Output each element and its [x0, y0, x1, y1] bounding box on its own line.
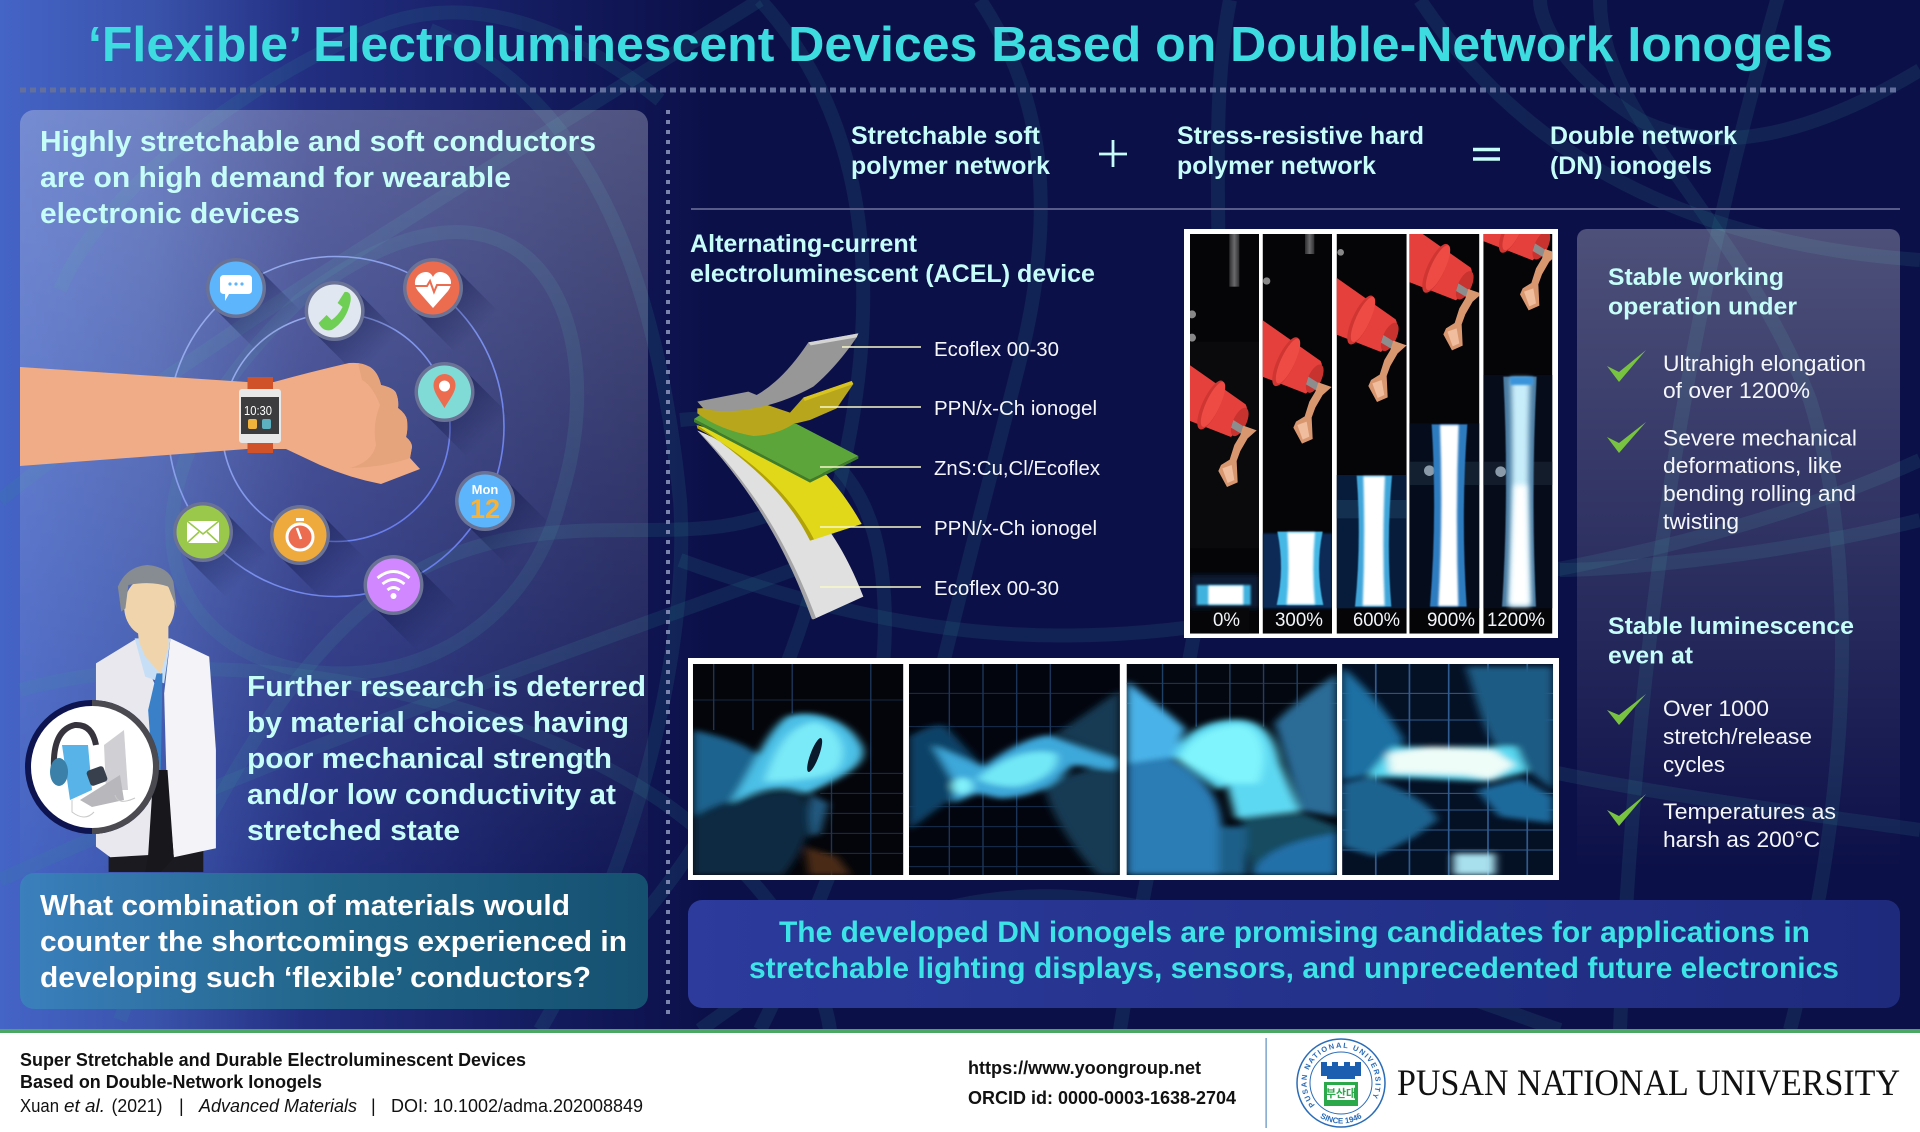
icon: wifi — [364, 555, 464, 655]
heading: stable working operation: operation under — [1608, 294, 1797, 320]
text: research deterred: by material choices having — [247, 707, 629, 739]
heading: stable luminescence: even at — [1608, 642, 1693, 670]
photo strip: deformations — [688, 658, 1559, 880]
layer labels: Ecoflex 00-30 — [934, 339, 1059, 361]
conclusion banner — [688, 900, 1900, 1008]
photo: 0% — [1190, 234, 1259, 634]
gadgets: headphones, phone, power bank, watch — [50, 725, 135, 817]
citation: | — [179, 1096, 184, 1116]
text: research deterred: and/or low conductivity at — [247, 779, 616, 811]
text: research deterred: Further research is deterred — [247, 671, 646, 703]
check item: deformations: twisting — [1663, 509, 1739, 534]
layer labels: PPN/x-Ch ionogel — [934, 518, 1097, 540]
ACEL device heading: Alternating-current — [690, 230, 918, 258]
layer labels: PPN/x-Ch ionogel — [934, 398, 1097, 420]
citation: Xuan — [20, 1096, 59, 1116]
layer: emissive ZnS — [694, 415, 858, 483]
arm with smartwatch — [20, 363, 420, 484]
term: soft network: Stretchable soft — [851, 122, 1041, 150]
layer labels: ZnS:Cu,Cl/Ecoflex — [934, 458, 1100, 480]
citation: Advanced Materials — [198, 1096, 357, 1116]
strain labels: 1200% — [1487, 610, 1545, 631]
term: soft network — [851, 122, 1050, 180]
term: hard network — [1177, 122, 1424, 180]
layer labels — [934, 339, 1100, 600]
university seal: 부산대 — [1326, 1086, 1356, 1100]
photo strip: stretching 0 to 1200% — [1184, 229, 1558, 638]
icon: mail — [173, 502, 273, 602]
panel background — [20, 110, 648, 910]
callout: question: What combination of materials would — [40, 890, 570, 922]
citation: et al. — [64, 1096, 105, 1116]
icon: calendar — [455, 471, 555, 571]
icon: calendar: 12 — [470, 494, 500, 524]
photo: stretched band — [1342, 664, 1553, 875]
heading: stretchable conductors: are on high demand for wearable — [40, 162, 511, 194]
check item: elongation — [1607, 350, 1866, 403]
layer: top Ecoflex — [697, 333, 858, 411]
heading: stable working operation: Stable working — [1608, 264, 1784, 291]
check item: temperature — [1607, 794, 1836, 852]
footer — [0, 1029, 1920, 1132]
callout: question — [20, 873, 648, 1009]
panel: wearable electronics problem — [20, 110, 648, 1009]
conclusion banner: stretchable lighting displays, sensors, and unprecedented future electronics — [749, 952, 1839, 985]
term: DN ionogels: Double network — [1550, 122, 1737, 150]
icon: location pin — [414, 362, 514, 462]
equation header — [851, 122, 1737, 180]
citation: DOI: 10.1002/adma.202008849 — [391, 1096, 643, 1116]
doctor figure — [96, 565, 216, 872]
callout: question: developing such ‘flexible’ conductors? — [40, 962, 591, 994]
citation: Super Stretchable and Durable Electroluminescent Devices — [20, 1050, 526, 1070]
citation — [20, 1050, 643, 1116]
layered device diagram — [694, 333, 863, 619]
term: hard network: Stress-resistive hard — [1177, 122, 1424, 150]
citation: | — [371, 1096, 376, 1116]
citation: Based on Double-Network Ionogels — [20, 1072, 322, 1092]
icon: chat — [206, 258, 306, 358]
text: research deterred — [247, 671, 646, 847]
check item: deformations: bending rolling and — [1663, 481, 1856, 506]
photo: 900% — [1409, 234, 1480, 634]
heading: stable luminescence — [1608, 613, 1854, 670]
check item: deformations — [1607, 422, 1857, 534]
ACEL device heading — [690, 230, 1095, 288]
heading: stretchable conductors: Highly stretchable and soft conductors — [40, 126, 596, 158]
smartwatch: 10:30 — [244, 403, 272, 418]
icon: calendar: Mon — [472, 482, 498, 497]
strain labels: 600% — [1353, 610, 1400, 631]
gadget circle — [25, 700, 159, 834]
check item: cycles: cycles — [1663, 752, 1725, 777]
strain labels: 900% — [1427, 610, 1475, 631]
photo: 1200% — [1483, 234, 1552, 634]
plus sign — [1099, 140, 1127, 167]
contact links — [968, 1058, 1236, 1108]
callout: question: counter the shortcomings experienced in — [40, 926, 627, 958]
heading: stable luminescence: Stable luminescence — [1608, 613, 1854, 640]
photo: 300% — [1262, 234, 1332, 634]
check item: elongation: of over 1200% — [1663, 378, 1810, 403]
text: research deterred: poor mechanical strength — [247, 743, 612, 775]
panel: stable operation — [1577, 229, 1900, 870]
conclusion banner: The developed DN ionogels are promising candidates for applications in — [779, 916, 1810, 949]
check item: deformations: deformations, like — [1663, 453, 1842, 478]
term: DN ionogels — [1550, 122, 1737, 180]
icon: stopwatch — [270, 505, 370, 605]
check item: elongation: Ultrahigh elongation — [1663, 351, 1866, 376]
strain labels: 0% — [1213, 610, 1240, 631]
panel background — [1577, 229, 1900, 870]
photo: rolled device — [693, 664, 903, 875]
smartwatch — [239, 377, 281, 453]
citation: (2021) — [112, 1096, 162, 1116]
text: research deterred: stretched state — [247, 815, 460, 847]
check item: cycles: stretch/release — [1663, 724, 1812, 749]
leader lines — [820, 347, 921, 587]
layer: top ionogel — [697, 381, 853, 436]
term: hard network: polymer network — [1177, 152, 1376, 180]
ACEL device heading: electroluminescent (ACEL) device — [690, 260, 1095, 288]
contact links: https://www.yoongroup.net — [968, 1058, 1201, 1078]
check item: temperature: Temperatures as — [1663, 799, 1836, 824]
layer: bottom ionogel — [697, 425, 862, 541]
term: soft network: polymer network — [851, 152, 1050, 180]
university seal: SINCE 1946 — [1320, 1113, 1362, 1124]
heading: stretchable conductors — [40, 126, 596, 230]
orbit rings — [168, 256, 504, 596]
icon: phone — [305, 281, 405, 381]
check item: temperature: harsh as 200°C — [1663, 827, 1820, 852]
photo: folded device — [1127, 664, 1337, 875]
strain labels: 300% — [1275, 610, 1323, 631]
icon: heart rate — [403, 258, 503, 358]
term: DN ionogels: (DN) ionogels — [1550, 152, 1712, 180]
heading: stretchable conductors: electronic devices — [40, 198, 300, 230]
photo: 600% — [1336, 234, 1407, 634]
check item: cycles — [1607, 694, 1812, 777]
university seal: PUSAN NATIONAL UNIVERSITY — [1301, 1042, 1381, 1108]
check item: deformations: Severe mechanical — [1663, 426, 1857, 450]
check item: cycles: Over 1000 — [1663, 696, 1769, 721]
layer: bottom Ecoflex — [697, 431, 863, 619]
layer labels: Ecoflex 00-30 — [934, 578, 1059, 600]
strain labels — [1213, 610, 1545, 631]
title: ‘Flexible’ Electroluminescent Devices Based on Double-Network Ionogels — [88, 18, 1833, 72]
equals sign — [1473, 150, 1500, 159]
photo: twisted device — [909, 664, 1120, 875]
heading: stable working operation — [1608, 264, 1797, 320]
contact links: ORCID id: 0000-0003-1638-2704 — [968, 1088, 1236, 1108]
